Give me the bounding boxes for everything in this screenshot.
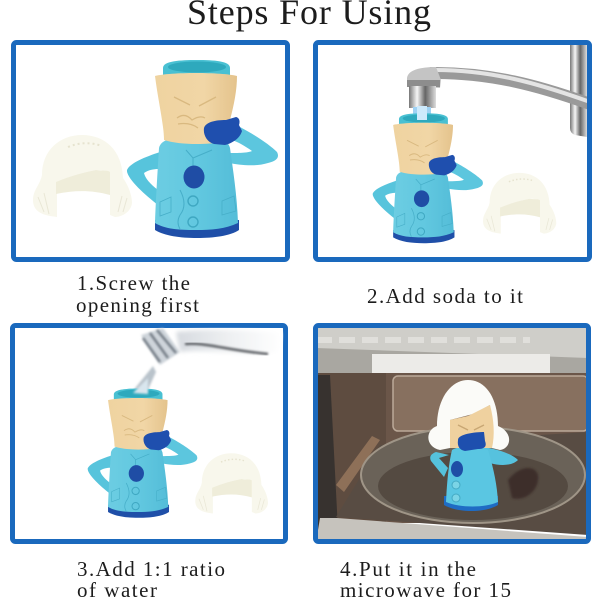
caption: step 3: 3.Add 1:1 ratio <box>77 557 225 581</box>
caption: step 1: 1.Screw the <box>77 271 190 295</box>
panel: step 3 <box>12 326 286 542</box>
caption: step 4 <box>340 557 511 600</box>
icon: wig lid <box>33 135 132 217</box>
icon: water bottle pouring <box>132 328 282 394</box>
caption: step 1: opening first <box>76 293 199 317</box>
caption: step 1 <box>76 271 199 317</box>
caption: step 2: 2.Add soda to it <box>367 284 523 308</box>
icon: figure under faucet <box>373 113 483 243</box>
caption: step 4: 4.Put it in the <box>340 557 476 581</box>
icon: wig lid <box>195 453 268 513</box>
caption: step 3 <box>77 557 225 600</box>
icon: fully assembled figure <box>428 380 518 511</box>
panel: step 2 <box>316 42 590 260</box>
microwave interior <box>316 325 588 542</box>
icon: angry mama figure with opening unscrewed <box>127 60 278 238</box>
panel: step 1 <box>14 42 288 260</box>
panel: step 4 microwave photo <box>315 325 589 542</box>
icon: figure with water <box>88 389 197 518</box>
icon: wig lid <box>483 173 556 234</box>
icon: faucet <box>407 45 590 137</box>
